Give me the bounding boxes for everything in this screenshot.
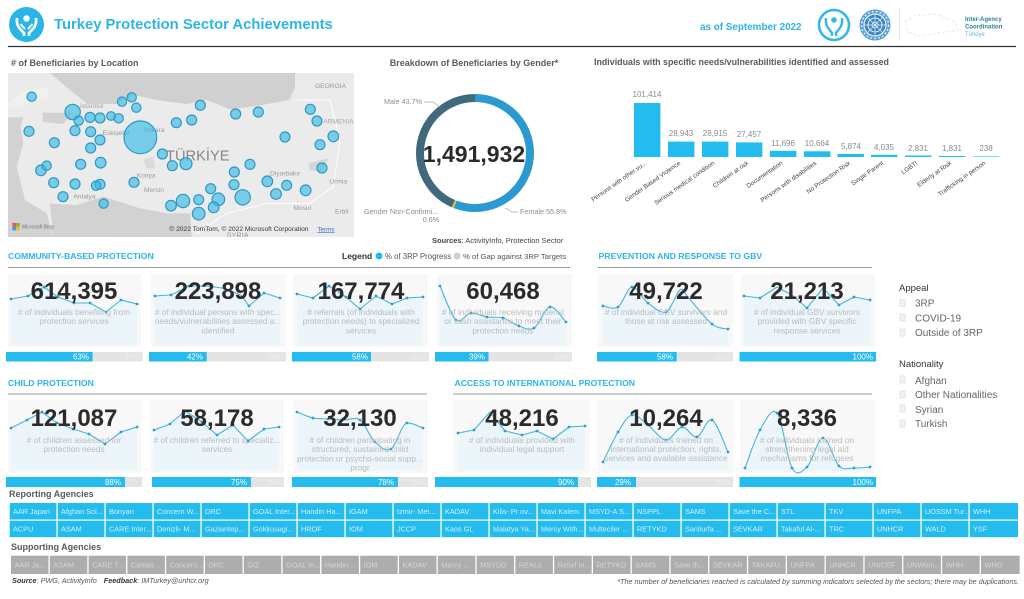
- card: trained on international protection: 29%: [615, 478, 631, 487]
- reporting agencies row 1: STL: [781, 507, 794, 516]
- supporting agencies: UNFPA: [790, 560, 815, 570]
- card: children participating: 78%: [378, 478, 394, 487]
- bar chart: specific needs: 27,457: [737, 130, 762, 139]
- map: beneficiaries by location: Ankara: [143, 127, 165, 134]
- slicer: nationality: [899, 359, 997, 430]
- reporting agencies row 2: YSF: [973, 524, 988, 534]
- supporting agencies: TAKAFU...: [752, 560, 786, 570]
- bar chart: specific needs: Trafficking in person: [937, 160, 988, 198]
- card: GBV survivors assessed: 49,722: [629, 278, 703, 305]
- map: beneficiaries by location: Mersin: [144, 187, 164, 194]
- supporting agencies: AAR Ja...: [14, 560, 45, 570]
- card: children participating: structured, sustained child: [312, 444, 409, 454]
- reporting agencies row 2: JCCP: [397, 524, 416, 534]
- reporting agencies row 1: KADAV: [445, 507, 469, 516]
- card: children participating: [292, 400, 428, 487]
- date: as of September 2022: [700, 22, 802, 33]
- slicer: nationality: Turkish: [915, 419, 947, 430]
- bar chart: specific needs: LGBTI: [900, 160, 919, 176]
- card: individuals benefiting: 37%: [125, 352, 140, 362]
- card: GBV specific response: # of individual GBV survivors: [754, 307, 860, 317]
- card: children assessed: [6, 400, 142, 487]
- coordination label: Coordination: [965, 24, 1003, 30]
- card: material or cash assistance: protection needs: [472, 325, 534, 335]
- bar chart: specific needs: Documentation: [745, 160, 785, 190]
- bar chart: specific needs: 2,831: [908, 144, 929, 153]
- slicer: appeal: [899, 283, 983, 339]
- reporting agencies row 1: SAMS: [685, 507, 706, 516]
- reporting agencies row 2: RETYKD: [637, 524, 667, 534]
- slicer: nationality: Syrian: [915, 405, 943, 416]
- reporting agencies row 1: UOSSM Tur...: [925, 507, 970, 516]
- supporting agencies: GOAL In...: [286, 560, 320, 570]
- bar chart: specific needs: [590, 90, 999, 207]
- supporting agencies: UNHCR: [829, 560, 856, 570]
- card: trained on international protection: international protection, rights,: [610, 444, 722, 454]
- donut chart: gender: Male 43.7%: [384, 97, 423, 106]
- heading: map: # of Beneficiaries by Location: [11, 58, 139, 68]
- bar chart: specific needs: Single Parent: [850, 160, 885, 187]
- supporting agencies: MSYDD: [480, 560, 506, 570]
- card: GBV survivors assessed: [597, 274, 733, 362]
- reporting agencies row 2: ACPU: [13, 524, 33, 534]
- reporting agencies row 2: Sanliurfa ...: [685, 524, 722, 534]
- map: beneficiaries by location: © 2022 TomTom, © 2022 Microsoft Corporation: [169, 225, 309, 233]
- map: beneficiaries by location: Erbil: [335, 208, 349, 215]
- bar chart: specific needs: Persons with other vu...: [590, 160, 648, 203]
- title: Turkey Protection Sector Achievements: [54, 17, 333, 33]
- reporting agencies row 2: UNHCR: [877, 524, 903, 534]
- card: GBV specific response: response services: [774, 325, 840, 335]
- card: children participating: 32,130: [323, 405, 397, 432]
- card: legal support: individual legal support: [480, 444, 565, 454]
- map: beneficiaries by location: ARMENIA: [323, 118, 354, 125]
- card: material or cash assistance: 39%: [469, 352, 485, 362]
- donut chart: gender: [364, 97, 567, 224]
- reporting agencies row 1: Izmir- Met...: [397, 507, 436, 516]
- supporting agencies: Relief In...: [558, 560, 591, 570]
- supporting agencies: Concern...: [170, 560, 203, 570]
- bar chart: specific needs: 11,696: [771, 139, 795, 148]
- supporting agencies: KADAV: [402, 560, 427, 570]
- card: children participating: # of children participating in: [309, 435, 411, 445]
- bar chart: specific needs: 28,915: [703, 129, 728, 138]
- card: trained on international protection: [597, 400, 733, 487]
- card: legal support: 90%: [558, 478, 574, 487]
- card: referrals: 58%: [352, 352, 368, 362]
- heading: access to international protection: ACCESS TO INTERNATIONAL PROTECTION: [454, 378, 635, 388]
- card: referrals: # referrals (of individuals with: [307, 307, 415, 317]
- card: referrals: 167,774: [318, 278, 405, 305]
- card: individuals benefiting: 614,395: [31, 278, 117, 305]
- reporting agencies row 1: Mavi Kalem: [541, 507, 579, 516]
- map: beneficiaries by location: Eskişehir: [103, 130, 130, 137]
- card: legal support: [435, 400, 591, 487]
- reporting agencies row 2: [10, 521, 1018, 537]
- card: children participating: progr: [350, 463, 370, 473]
- bar chart: specific needs: Elderly at Risk: [916, 159, 954, 189]
- card: material or cash assistance: 61%: [555, 352, 570, 362]
- legend: Legend: [342, 251, 372, 261]
- slicer: appeal: 3RP: [915, 298, 935, 310]
- reporting agencies row 2: HROF: [301, 524, 322, 534]
- bar chart: specific needs: 10,664: [805, 139, 830, 148]
- slicer: nationality: Afghan: [915, 376, 947, 387]
- card: trained on legal aid: mechanisms for refugees: [760, 453, 854, 463]
- reporting agencies row 1: GOAL Inter...: [253, 507, 295, 516]
- card: trained on legal aid: strengthening legal aid: [765, 444, 849, 454]
- supporting agencies: CARE T...: [92, 560, 124, 570]
- card: GBV survivors assessed: 42%: [716, 352, 731, 362]
- donut chart: gender: Gender Non-Confirmi...: [364, 207, 438, 216]
- reporting agencies row 2: Takaful Al-...: [781, 524, 821, 534]
- card: children referred: services: [202, 444, 232, 454]
- card: GBV specific response: 100%: [853, 352, 873, 362]
- card: individuals benefiting: protection services: [39, 316, 109, 326]
- heading: community-based protection: COMMUNITY-BASED PROTECTION: [8, 251, 154, 261]
- card: GBV specific response: [740, 274, 876, 362]
- card: referrals: [292, 274, 429, 362]
- supporting agencies: RETYKD: [596, 560, 626, 570]
- slicer: nationality: Nationality: [899, 359, 944, 370]
- bar chart: specific needs: Serious medical condition: [653, 160, 717, 207]
- card: children assessed: # of children assessed for: [27, 435, 121, 445]
- reporting agencies row 2: WALD: [925, 524, 946, 534]
- card: material or cash assistance: 60,468: [466, 278, 540, 305]
- card: children assessed: 121,087: [31, 405, 117, 432]
- bar chart: specific needs: Children at risk: [712, 159, 751, 190]
- supporting agencies: Handin ...: [325, 560, 356, 570]
- card: persons with specific needs: 223,898: [175, 278, 261, 305]
- card: referrals: services: [346, 325, 376, 335]
- card: children assessed: protection needs: [43, 444, 105, 454]
- reporting agencies row 1: AAR Japan: [13, 507, 50, 516]
- supporting agencies: Save th...: [674, 560, 705, 570]
- map: beneficiaries by location: Mosul: [293, 205, 312, 212]
- card: material or cash assistance: [435, 274, 572, 362]
- slicer: appeal: COVID-19: [915, 314, 962, 324]
- reporting agencies row 2: SEVKAR: [733, 524, 763, 534]
- icon: protection logo: [9, 7, 44, 42]
- bar chart: specific needs: 4,035: [874, 143, 895, 152]
- heading: child protection: CHILD PROTECTION: [8, 378, 94, 388]
- card: children assessed: 88%: [105, 478, 121, 487]
- card: GBV survivors assessed: # of individual GBV survivors and: [605, 307, 727, 317]
- header bar: [9, 7, 1003, 42]
- sources: Sources: ActivityInfo, Protection Sector: [432, 236, 564, 245]
- supporting agencies: SAMS: [635, 560, 656, 570]
- reporting agencies row 1: Afghan Sol...: [61, 507, 103, 516]
- reporting agencies row 1: DRC: [205, 507, 221, 516]
- card: trained on legal aid: 8,336: [777, 405, 837, 432]
- map: beneficiaries by location: Konya: [137, 172, 156, 179]
- card: children referred: # of children referred to specializ...: [154, 435, 280, 445]
- reporting agencies row 2: Kaos GL: [445, 524, 473, 534]
- card: persons with specific needs: # of individual persons with spec...: [155, 307, 281, 317]
- supporting agencies: Caritas ...: [131, 560, 162, 570]
- supporting agencies: UNWom...: [907, 560, 940, 570]
- reporting agencies row 2: Malatya Ya...: [493, 524, 535, 534]
- reporting agencies row 1: Concern W...: [157, 507, 199, 516]
- supporting agencies: ASAM: [53, 560, 74, 570]
- reporting agencies row 1: Handin Ha...: [301, 507, 342, 516]
- reporting agencies row 1: Save the C...: [733, 507, 775, 516]
- bar chart: specific needs: 5,874: [841, 142, 862, 151]
- card: legal support: # of individuals provided with: [469, 435, 575, 445]
- card: material or cash assistance: or cash assistance to meet their: [444, 316, 562, 326]
- card: trained on international protection: 10,264: [629, 405, 703, 432]
- card: legal support: 48,216: [485, 405, 559, 432]
- reporting agencies row 2: Gaziantep...: [205, 524, 244, 534]
- bar chart: specific needs: Persons with disabilities: [759, 160, 818, 204]
- reporting agencies row 1: WHH: [973, 507, 990, 516]
- card: children referred: 58,178: [180, 405, 254, 432]
- icon: Turkey outline map: [905, 14, 958, 36]
- supporting agencies: WHH: [946, 560, 963, 570]
- card: children referred: [150, 400, 284, 487]
- supporting agencies: GIZ: [247, 560, 260, 570]
- map: beneficiaries by location: [8, 73, 354, 239]
- coordination label: Inter-Agency: [965, 17, 1002, 23]
- slicer: appeal: Outside of 3RP: [915, 328, 983, 339]
- legend: [342, 251, 566, 261]
- bar chart: specific needs: No Protection Risk: [805, 159, 853, 196]
- map: beneficiaries by location: Terms: [317, 226, 335, 233]
- reporting agencies row 2: ASAM: [61, 524, 82, 534]
- donut chart: gender: 0.6%: [423, 215, 440, 224]
- card: individuals benefiting: # of individuals benefiting from: [18, 307, 130, 317]
- reporting agencies row 2: Mercy With...: [541, 524, 584, 534]
- icon: protection logo outline: [819, 10, 849, 40]
- reporting agencies row 1: Bonyan: [109, 507, 134, 516]
- bar chart: specific needs: 101,414: [633, 90, 662, 99]
- card: referrals: protection needs) to specialized: [303, 316, 420, 326]
- card: trained on international protection: # of individuals trained on: [619, 435, 713, 445]
- map: beneficiaries by location: SYRIA: [227, 230, 249, 239]
- card: trained on international protection: services and available assistance: [604, 453, 728, 463]
- card: children participating: protection or psycho-social supp...: [297, 453, 423, 463]
- legend: % of 3RP Progress: [385, 252, 451, 261]
- supporting agencies: UNICEF: [868, 560, 896, 570]
- slicer: nationality: Other Nationalities: [915, 390, 997, 401]
- coordination label: Türkiye: [965, 32, 985, 38]
- card: persons with specific needs: [149, 274, 286, 362]
- reporting agencies row 1: MSYD-A S...: [589, 507, 630, 516]
- slicer: appeal: Appeal: [899, 283, 929, 294]
- reporting agencies row 2: IOM: [349, 524, 363, 534]
- supporting agencies: IOM: [364, 560, 377, 570]
- reporting agencies row 1: Kilis- Pr ov...: [493, 507, 533, 516]
- legend: % of Gap against 3RP Targets: [463, 252, 566, 261]
- reporting agencies row 2: TRC: [829, 524, 844, 534]
- heading: gender: Breakdown of Beneficiaries by Gender*: [390, 58, 559, 68]
- card: trained on legal aid: [740, 400, 876, 487]
- card: material or cash assistance: # of individuals receiving material: [442, 307, 564, 317]
- donut chart: gender: Female 55.8%: [520, 207, 567, 216]
- map: beneficiaries by location: TÜRKİYE: [166, 147, 230, 165]
- bar chart: specific needs: 238: [979, 144, 993, 153]
- supporting agencies: Mercy ...: [441, 560, 469, 570]
- map: beneficiaries by location: Antalya: [73, 194, 96, 201]
- card: persons with specific needs: identified: [201, 325, 235, 335]
- card: trained on legal aid: # of individuals trained on: [760, 435, 854, 445]
- card: GBV survivors assessed: 58%: [657, 352, 673, 362]
- footnote: *The number of beneficiaries reached is calculated by summing indicators selected by the sectors; there may be duplications.: [617, 577, 1019, 586]
- card: children participating: 22%: [411, 478, 426, 487]
- reporting agencies row 2: Denizli- M...: [157, 524, 196, 534]
- card: persons with specific needs: needs/vulnerabilities assessed a...: [155, 316, 281, 326]
- map: beneficiaries by location: GEORGIA: [315, 83, 347, 90]
- card: GBV specific response: 21,213: [770, 278, 844, 305]
- heading: needs: Individuals with specific needs/vulnerabilities identified and assessed: [594, 57, 889, 67]
- card: referrals: 42%: [412, 352, 427, 362]
- card: children referred: 75%: [231, 478, 247, 487]
- card: individuals benefiting: 63%: [73, 352, 89, 362]
- supporting agencies: WHO: [984, 560, 1003, 570]
- icon: UN emblem: [860, 10, 890, 40]
- supporting agencies: [11, 556, 1020, 574]
- supporting agencies: SEVKAR: [713, 560, 743, 570]
- card: children referred: 25%: [267, 478, 282, 487]
- map: beneficiaries by location: Diyarbakır: [270, 171, 301, 178]
- supporting agencies: DRC: [208, 560, 224, 570]
- reporting agencies row 2: Multeciler ...: [589, 524, 628, 534]
- heading: reporting agencies: Reporting Agencies: [9, 489, 94, 499]
- donut chart: gender: 1,491,932: [423, 141, 525, 167]
- supporting agencies: REALs: [519, 560, 542, 570]
- heading: GBV: PREVENTION AND RESPONSE TO GBV: [598, 251, 762, 261]
- card: individuals benefiting: [6, 274, 143, 362]
- bar chart: specific needs: Gender Based Violence: [624, 160, 683, 204]
- map: beneficiaries by location: İstanbul: [80, 101, 104, 110]
- map: beneficiaries by location: Urmia: [329, 178, 347, 185]
- bar chart: specific needs: 1,831: [942, 144, 963, 153]
- card: persons with specific needs: 42%: [187, 352, 203, 362]
- reporting agencies row 1: IGAM: [349, 507, 368, 516]
- heading: supporting agencies: Supporting Agencies: [11, 542, 101, 552]
- reporting agencies row 1: NSPPL: [637, 507, 661, 516]
- card: persons with specific needs: 58%: [269, 352, 284, 362]
- card: GBV survivors assessed: those at risk assessed: [625, 316, 707, 326]
- reporting agencies row 1: UNFPA: [877, 507, 901, 516]
- reporting agencies row 2: Gokkusagi...: [253, 524, 294, 534]
- reporting agencies row 1: TKV: [829, 507, 843, 516]
- map: beneficiaries by location: Microsoft Bing: [22, 225, 54, 231]
- bar chart: specific needs: 28,943: [669, 129, 694, 138]
- card: GBV specific response: provided with GBV specific: [758, 316, 856, 326]
- reporting agencies row 1: [10, 503, 1018, 520]
- source and feedback: Source: PWG, ActivityInfo Feedback: IMTurkey@unhcr.org: [12, 576, 209, 585]
- reporting agencies row 2: CARE Inter...: [109, 524, 152, 534]
- card: trained on international protection: 71%: [716, 478, 731, 487]
- card: trained on legal aid: 100%: [853, 478, 873, 487]
